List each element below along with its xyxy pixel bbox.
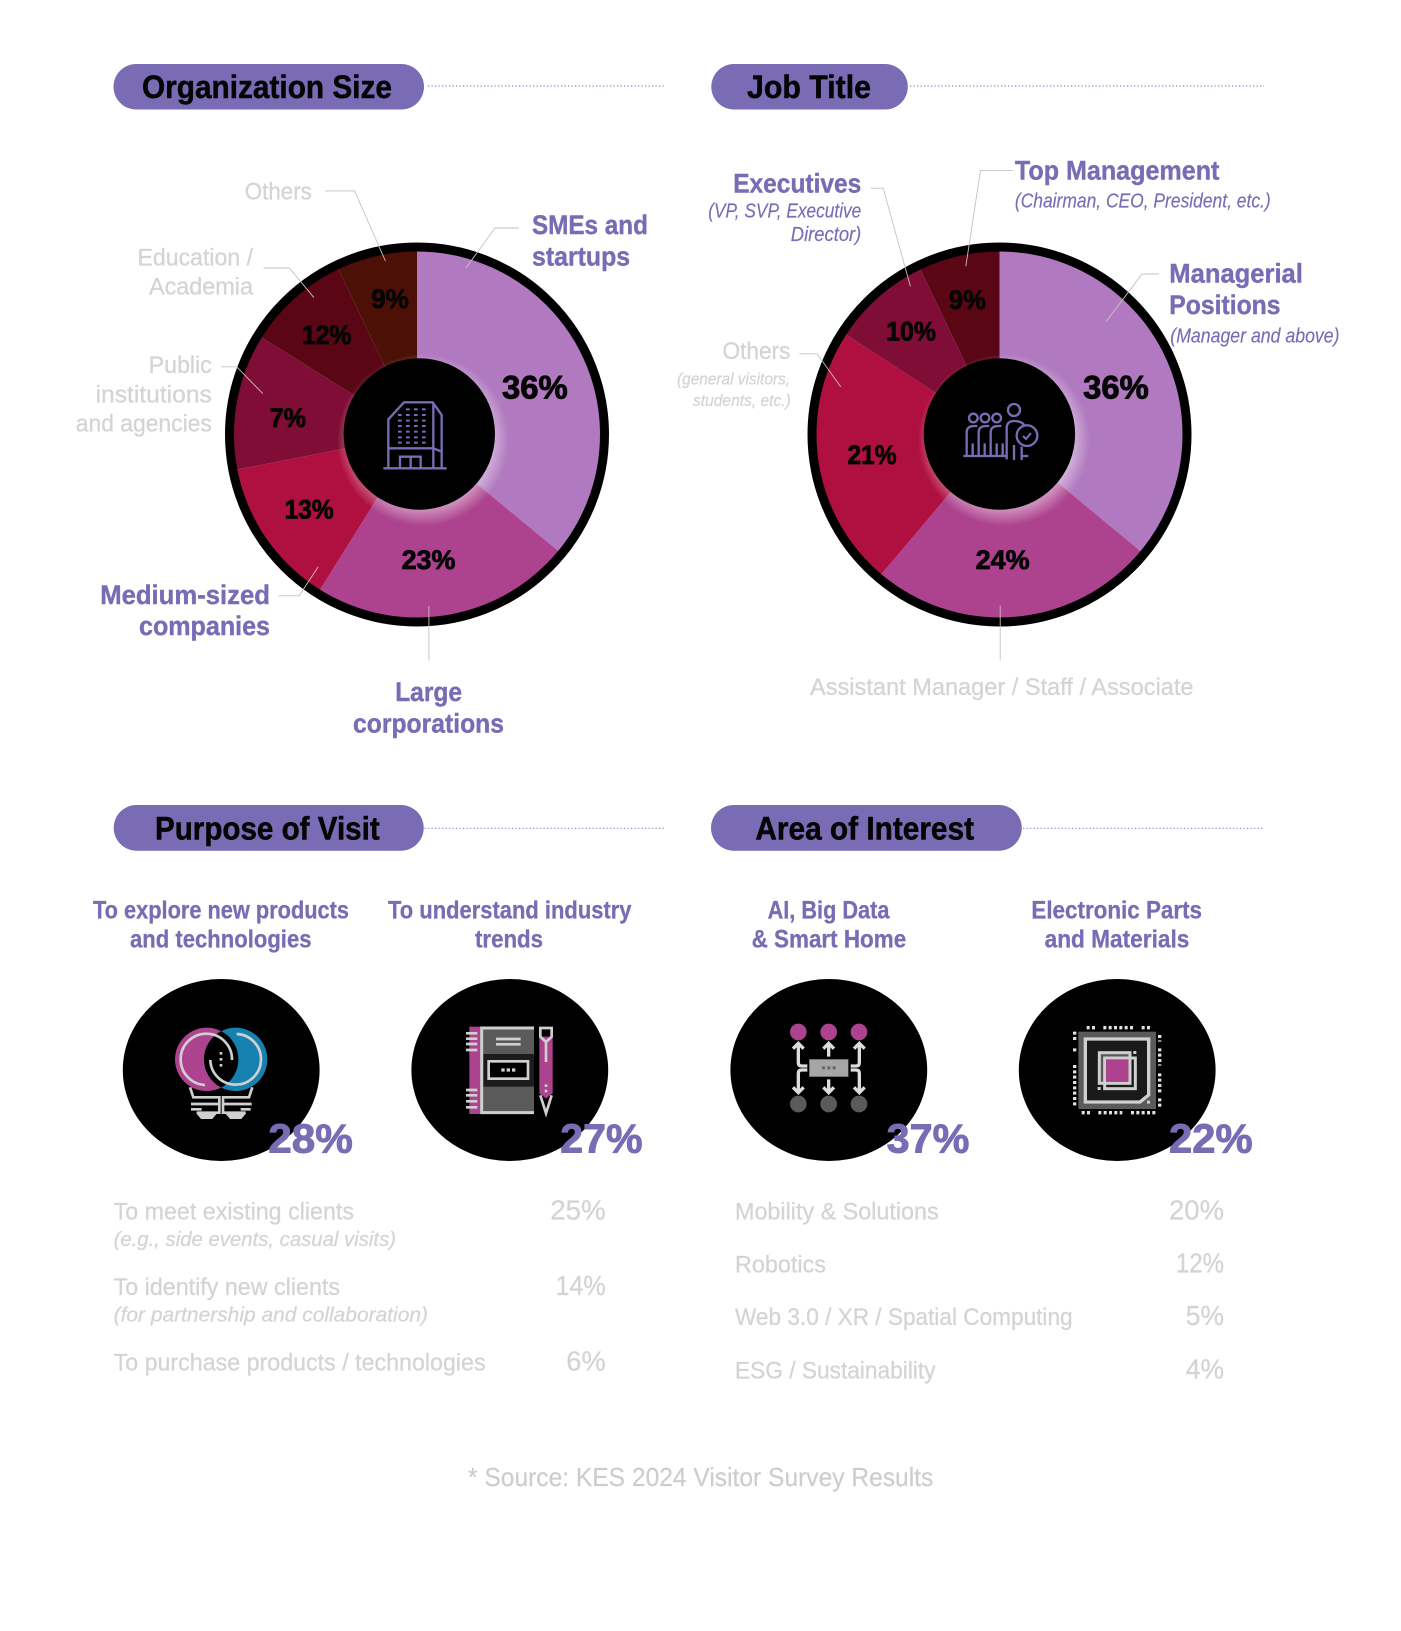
donut chart: job title: 10% [886, 316, 936, 346]
label: managerial positions: Positions [1169, 290, 1280, 320]
top item: explore new products: and technologies [130, 926, 312, 954]
donut chart: job title: 9% [949, 285, 986, 315]
label: large corporations [353, 606, 504, 738]
list: other areas of interest: ESG / Sustainability [735, 1357, 936, 1384]
label: public institutions and agencies: institutions [96, 382, 212, 408]
value: 27% [560, 1115, 643, 1161]
list: other purposes: 14% [556, 1270, 606, 1301]
top item: explore new products [93, 896, 353, 1161]
list: other areas of interest: 12% [1176, 1248, 1224, 1279]
list: other purposes: (for partnership and collaboration) [114, 1305, 428, 1327]
label: public institutions and agencies: Public [149, 352, 212, 379]
donut chart: organization size: 7% [270, 403, 306, 433]
top item: AI, big data and smart home [730, 896, 969, 1161]
label: large corporations: Large [395, 677, 462, 707]
list: other areas of interest [735, 1194, 1224, 1384]
label: medium-sized companies [100, 567, 318, 641]
label: assistant manager / staff / associate: Assistant Manager / Staff / Associate [810, 674, 1194, 701]
heading: organization size: Organization Size [142, 69, 392, 105]
list: other areas of interest: 20% [1169, 1194, 1224, 1225]
list: other purposes [114, 1194, 606, 1377]
label: top management [966, 156, 1271, 266]
panel: organization size [76, 64, 666, 738]
donut chart: organization size: 13% [285, 495, 334, 525]
icon: notebook and pencil [466, 1027, 553, 1114]
top item: understand industry trends: trends [475, 926, 543, 954]
list: other purposes: To meet existing clients [114, 1198, 354, 1225]
label: executives [708, 168, 910, 286]
label: executives: (VP, SVP, Executive [708, 201, 861, 223]
heading: job title [711, 64, 1264, 110]
donut chart: organization size: 36% [502, 370, 568, 406]
label: others: Others [722, 338, 790, 365]
label: SMEs and startups: startups [532, 241, 630, 271]
icon: building [383, 402, 447, 468]
label: managerial positions: Managerial [1169, 258, 1303, 288]
source note: * Source: KES 2024 Visitor Survey Results [468, 1462, 933, 1492]
label: public institutions and agencies [76, 352, 263, 438]
panel: area of interest [711, 805, 1264, 1384]
donut chart: job title: 24% [976, 545, 1030, 575]
label: education / academia: Education / [138, 244, 253, 271]
top item: electronic parts and materials: Electronic Parts [1031, 896, 1202, 924]
label: top management: (Chairman, CEO, President, etc.) [1015, 190, 1271, 212]
top item: understand industry trends [388, 896, 643, 1161]
heading: purpose of visit: Purpose of Visit [155, 810, 380, 846]
heading: job title: Job Title [747, 69, 871, 105]
list: other areas of interest: Robotics [735, 1252, 826, 1279]
list: other purposes: To purchase products / technologies [114, 1350, 486, 1377]
list: other areas of interest: 4% [1186, 1353, 1224, 1384]
icon: microchip [1075, 1028, 1160, 1113]
donut chart: job title [812, 246, 1188, 623]
list: other purposes: 25% [550, 1194, 606, 1225]
icon: people with check badge [963, 404, 1037, 460]
top item: AI, big data and smart home: AI, Big Data [768, 896, 890, 924]
heading: area of interest [711, 805, 1264, 851]
top item: understand industry trends: To understand industry [388, 896, 632, 924]
heading: organization size [114, 64, 666, 110]
donut chart: organization size: 23% [402, 545, 455, 575]
heading: purpose of visit [114, 805, 665, 851]
label: education / academia: Academia [149, 274, 254, 300]
list: other areas of interest: 5% [1186, 1300, 1224, 1331]
list: other areas of interest: Mobility & Solutions [735, 1198, 939, 1225]
value: 22% [1169, 1115, 1253, 1161]
label: large corporations: corporations [353, 708, 504, 738]
label: medium-sized companies: Medium-sized [100, 580, 270, 610]
panel: job title [677, 64, 1340, 701]
label: others: students, etc.) [693, 391, 791, 410]
donut chart: organization size [229, 246, 605, 622]
label: public institutions and agencies: and agencies [76, 410, 212, 438]
donut chart: organization size: 9% [371, 284, 409, 314]
label: others: (general visitors, [677, 370, 790, 389]
label: others: Others [245, 178, 312, 205]
label: managerial positions [1106, 258, 1340, 348]
value: 37% [887, 1115, 969, 1161]
label: others [245, 178, 385, 261]
top item: electronic parts and materials: and Materials [1045, 926, 1189, 954]
list: other purposes: 6% [566, 1346, 606, 1377]
list: other purposes: (e.g., side events, casual visits) [114, 1229, 396, 1251]
heading: area of interest: Area of Interest [755, 810, 974, 846]
label: others [677, 338, 841, 410]
top item: AI, big data and smart home: & Smart Home [752, 926, 906, 954]
donut chart: job title: 21% [848, 440, 897, 470]
value: 28% [268, 1115, 353, 1161]
list: other areas of interest: Web 3.0 / XR / Spatial Computing [735, 1304, 1073, 1331]
label: top management: Top Management [1015, 156, 1219, 186]
icon: light bulbs [175, 1028, 267, 1118]
panel: purpose of visit [93, 805, 666, 1377]
top item: explore new products: To explore new products [93, 896, 349, 924]
icon: data network [790, 1024, 867, 1112]
top item: electronic parts and materials [1019, 896, 1253, 1161]
label: SMEs and startups: SMEs and [532, 210, 648, 240]
label: managerial positions: (Manager and above) [1170, 326, 1340, 348]
donut chart: job title: 36% [1083, 370, 1149, 406]
label: SMEs and startups [466, 210, 648, 271]
label: executives: Director) [791, 224, 861, 246]
label: education / academia [138, 244, 314, 300]
label: medium-sized companies: companies [139, 611, 270, 641]
list: other purposes: To identify new clients [114, 1274, 340, 1301]
label: executives: Executives [733, 168, 861, 198]
donut chart: organization size: 12% [302, 320, 351, 350]
